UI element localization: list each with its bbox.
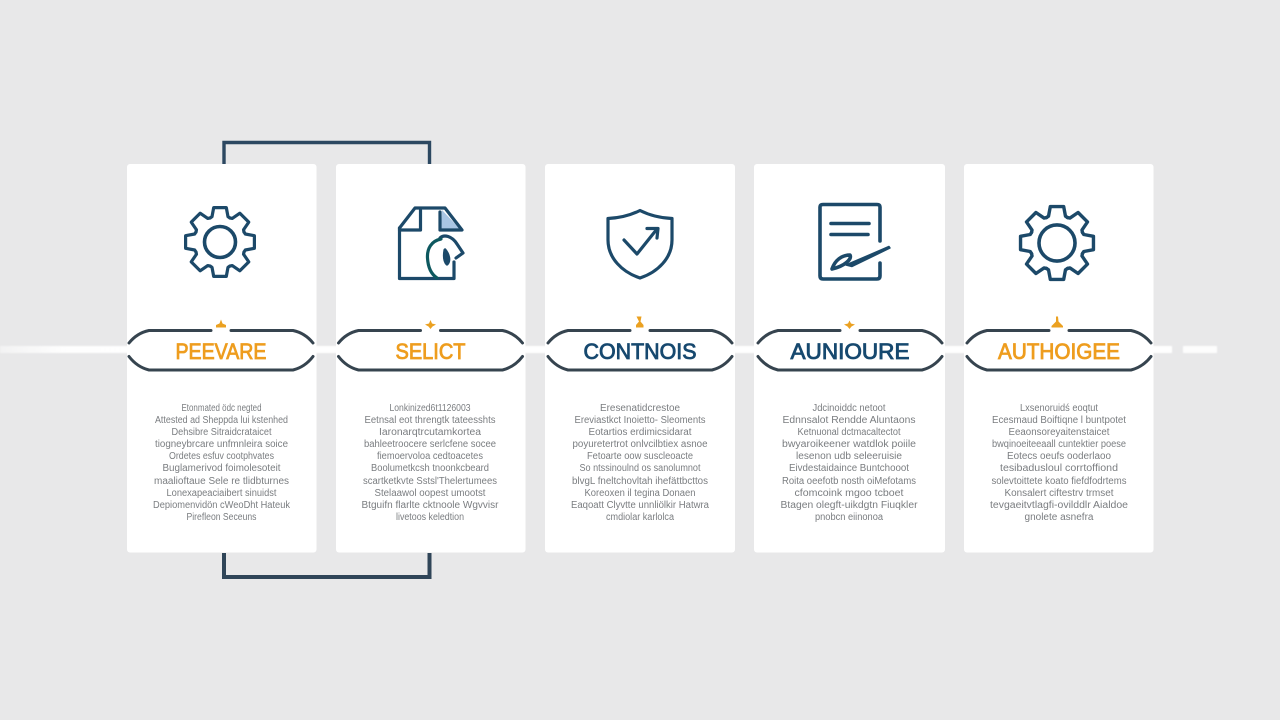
body text: Eetnsal eot threngtk tateesshts [364, 415, 496, 426]
body text: Btguifn flarlte cktnoole Wgvvisr [362, 500, 499, 511]
timeline connector [0, 346, 1217, 353]
panel: controls [545, 164, 735, 552]
body text: cfomcoink mgoo tcboet [794, 488, 904, 499]
label badge: CONTNOIS [584, 339, 696, 364]
top bracket [224, 142, 430, 164]
body text: Ednnsalot Rendde Aluntaons [782, 415, 916, 426]
body text: Fetoarte oow suscleoacte [587, 451, 693, 462]
body text: lesenon udb seleeruisie [796, 451, 902, 462]
body text: Eotartios erdimicsidarat [588, 427, 692, 438]
label badge [548, 330, 732, 370]
body text: tiogneybrcare unfmnleira soice [155, 439, 288, 450]
body text: solevtoittete koato fiefdfodrtems [992, 476, 1126, 487]
icon: gear [1021, 207, 1093, 279]
icon: document with head [400, 208, 463, 278]
body text [153, 403, 291, 523]
label badge [758, 330, 942, 370]
body text: Etonmated ödc negted [182, 403, 262, 414]
body text: scartketkvte Sstsl'Thelertumees [363, 476, 497, 487]
label badge: SELICT [396, 339, 466, 364]
body text: Ketnuonal dctmacaltectot [798, 427, 901, 438]
body text: Lonkinized6t1126003 [390, 403, 471, 414]
panel: prepare [127, 164, 316, 552]
body text: Lonexapeaciaibert sinuidst [166, 488, 277, 499]
body text: blvgL fneltchovltah ihefättbcttos [572, 476, 708, 487]
body text: Pirefleon Seceuns [186, 512, 256, 523]
panel: authorize second [964, 164, 1154, 552]
body text: Lxsenoruidś eoqtut [1020, 403, 1098, 414]
label badge [129, 330, 313, 370]
body text: maalioftaue Sele re tlidbturnes [154, 476, 289, 487]
marker [636, 316, 644, 328]
label badge [967, 330, 1151, 370]
marker [1052, 316, 1063, 328]
body text: gnolete asnefra [1024, 512, 1094, 523]
body text: Eivdestaidaince Buntchooot [789, 463, 909, 474]
body text: Eotecs oeufs ooderlaoo [1007, 451, 1111, 462]
label badge [338, 330, 522, 370]
marker [844, 320, 855, 329]
body text: Koreoxen il tegina Donaen [584, 488, 696, 499]
marker [216, 320, 226, 328]
body text: Eeaonsoreyaitenstaicet [1008, 427, 1110, 438]
body text: Btagen olegft-uikdgtn Fiuqkler [780, 500, 918, 511]
body text: So ntssinoulnd os sanolumnot [580, 463, 701, 474]
body text: tevgaeitvtlagfi-ovilddlr Aialdoe [990, 500, 1128, 511]
body text [780, 403, 918, 523]
icon: shield with check [608, 210, 672, 278]
body text: tesibadusloul corrtoffiond [1000, 463, 1118, 474]
body text: Buglamerivod foimolesoteit [162, 463, 281, 474]
body text: bahleetroocere serlcfene socee [364, 439, 496, 450]
body text: Ordetes esfuv cootphvates [169, 451, 274, 462]
body text: pnobcn eiinonoa [815, 512, 883, 523]
body text [571, 403, 709, 523]
body text: Eaqoatt Clyvtte unnliölkir Hatwra [571, 500, 709, 511]
bottom bracket [224, 553, 430, 577]
body text: bwqinoeiteeaall cuntektier poese [992, 439, 1126, 450]
body text: Ereviastkct Inoietto- Sleoments [574, 415, 706, 426]
body text: fiemoervoloa cedtoacetes [377, 451, 483, 462]
body text: Depiomenvidön cWeoDht Hateuk [153, 500, 291, 511]
body text: Stelaawol oopest umootst [374, 488, 486, 499]
body text: bwyaroikeener watdlok poiile [782, 439, 916, 450]
body text: cmdiolar karlolca [606, 512, 674, 523]
body text: poyuretertrot onlvcilbtiex asnoe [572, 439, 708, 450]
body text: Boolumetkcsh tnoonkcbeard [371, 463, 489, 474]
body text: Roita oeefotb nosth oiMefotams [782, 476, 916, 487]
marker [425, 320, 436, 329]
body text: Dehsibre Sitraidcrataicet [172, 427, 272, 438]
icon: gear [186, 208, 254, 276]
body text: Jdcinoiddc netoot [812, 403, 886, 414]
body text: Attested ad Sheppda lui kstenhed [155, 415, 288, 426]
body text [362, 403, 499, 523]
body text: Iaronarqtrcutamkortea [379, 427, 481, 438]
body text [990, 403, 1128, 523]
panel: select [336, 164, 526, 552]
body text: Ecesmaud Boiftiqne l buntpotet [992, 415, 1126, 426]
body text: Eresenatidcrestoe [600, 403, 680, 414]
label badge: AUTHOIGEE [998, 339, 1120, 364]
body text: Konsalert ciftestrv trmset [1004, 488, 1114, 499]
panel: authorize [754, 164, 945, 552]
label badge: PEEVARE [176, 339, 266, 364]
body text: livetoos keledtion [396, 512, 464, 523]
label badge: AUNIOURE [790, 339, 910, 364]
icon: signed document [820, 204, 890, 279]
